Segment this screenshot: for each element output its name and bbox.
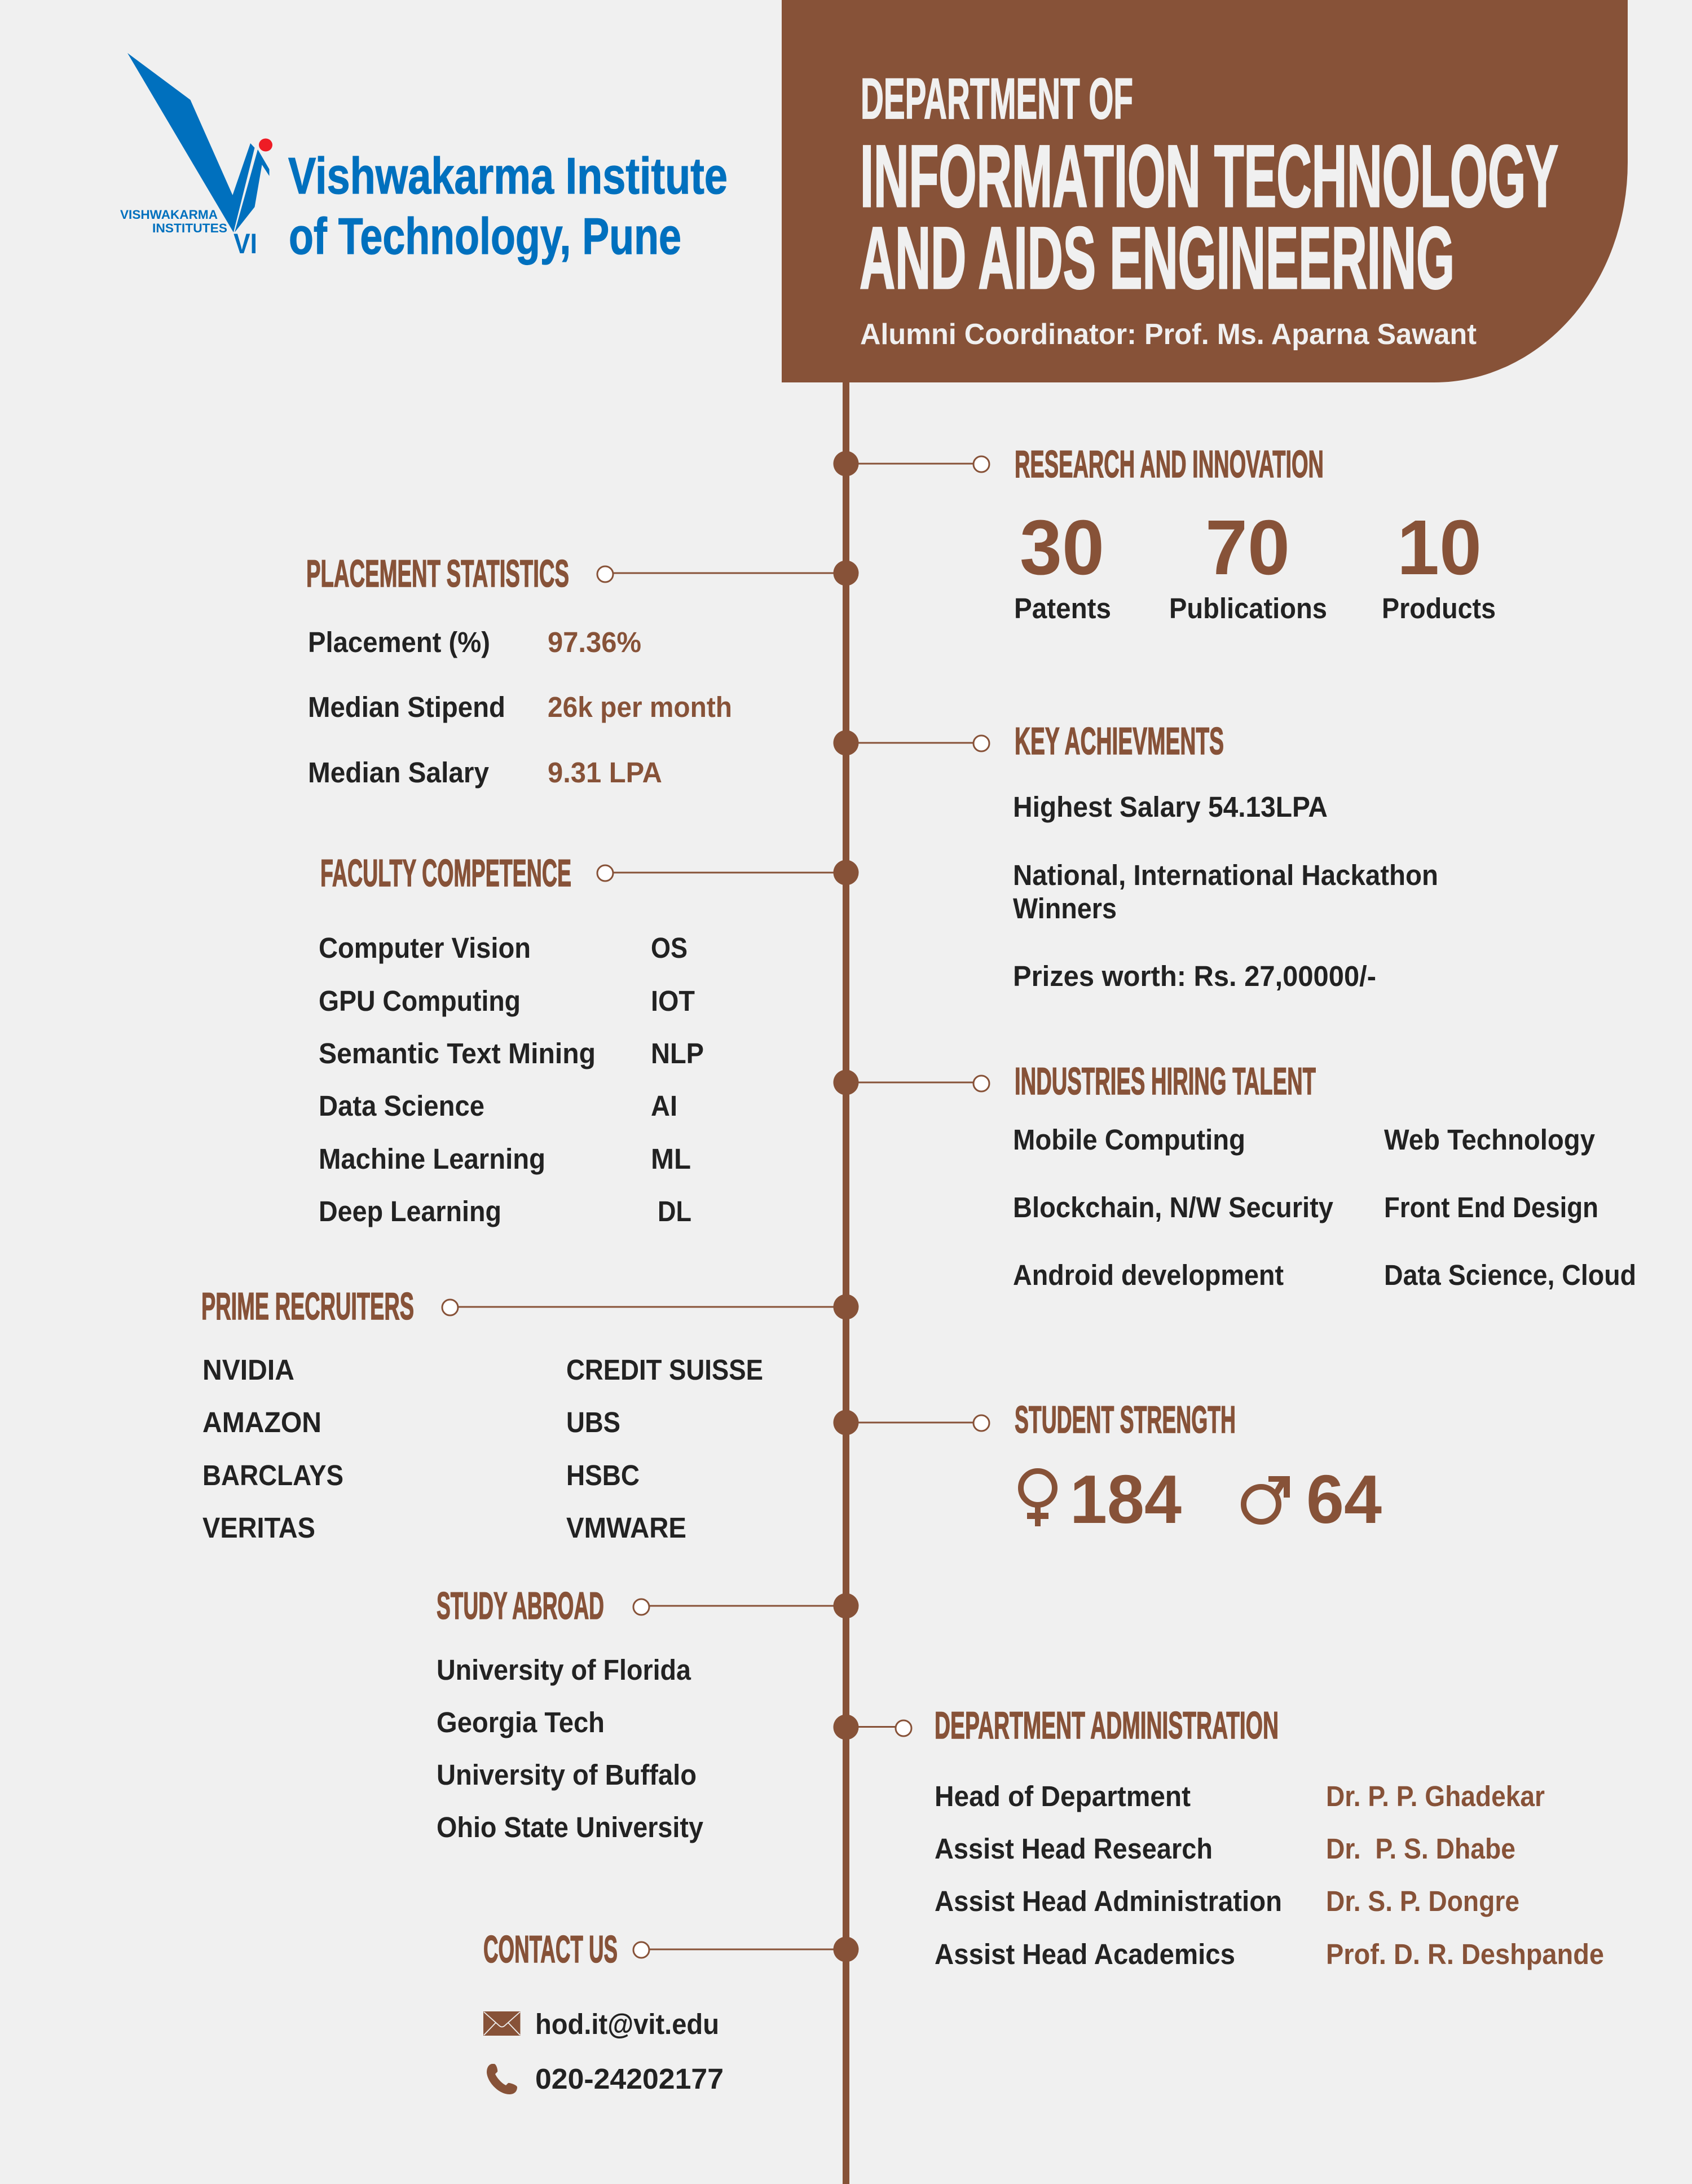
- industries list: Web Technology: [1384, 1124, 1596, 1156]
- achievements list: Winners: [1013, 892, 1117, 924]
- stat: patents: Patents: [1014, 592, 1111, 624]
- connector: [633, 1593, 858, 1619]
- stat rows: 9.31 LPA: [548, 756, 662, 789]
- stat: products: [1382, 504, 1496, 624]
- stat: patents: [1014, 504, 1111, 624]
- universities list: Ohio State University: [437, 1811, 704, 1843]
- industries list: Front End Design: [1384, 1191, 1598, 1223]
- administration roster: Dr. P. P. Ghadekar: [1326, 1780, 1545, 1812]
- institute name: of Technology, Pune: [289, 208, 681, 265]
- connector: [834, 451, 989, 476]
- administration roster: Assist Head Administration: [935, 1885, 1282, 1917]
- competence list: Semantic Text Mining: [319, 1037, 596, 1069]
- competence list: IOT: [651, 985, 695, 1017]
- administration roster: Assist Head Research: [935, 1833, 1213, 1865]
- achievements list: Highest Salary 54.13LPA: [1013, 791, 1328, 823]
- panel: placement statistics: [306, 552, 858, 789]
- recruiters list: HSBC: [566, 1459, 640, 1491]
- panel: department administration: [834, 1704, 1604, 1970]
- universities list: University of Buffalo: [437, 1759, 697, 1791]
- stat: products: 10: [1397, 504, 1482, 591]
- heading: KEY ACHIEVMENTS: [1015, 720, 1224, 763]
- industries list: [1013, 1124, 1636, 1291]
- competence list: NLP: [651, 1037, 704, 1069]
- industries list: Blockchain, N/W Security: [1013, 1191, 1334, 1223]
- email address: hod.it@vit.edu: [535, 2008, 719, 2040]
- competence list: OS: [651, 932, 688, 964]
- universities list: Georgia Tech: [437, 1706, 605, 1738]
- institute name: [288, 148, 728, 265]
- recruiters list: VERITAS: [202, 1512, 315, 1544]
- competence list: DL: [658, 1195, 691, 1227]
- competence list: Deep Learning: [319, 1195, 501, 1227]
- industries list: Data Science, Cloud: [1384, 1259, 1636, 1291]
- institute name: Vishwakarma Institute: [288, 148, 728, 205]
- stat rows: Median Salary: [308, 756, 490, 789]
- phone number: 020-24202177: [535, 2063, 724, 2095]
- department label: DEPARTMENT OF: [861, 67, 1133, 131]
- panel: research and innovation: [834, 443, 1496, 624]
- heading: STUDENT STRENGTH: [1015, 1398, 1236, 1441]
- heading: PRIME RECRUITERS: [201, 1285, 414, 1328]
- connector: [834, 1715, 911, 1740]
- icon: male symbol: [1244, 1476, 1290, 1522]
- logo: Vishwakarma Institute of Technology: [120, 53, 728, 265]
- department title: [860, 127, 1558, 307]
- competence list: Computer Vision: [319, 932, 531, 964]
- male count: 64: [1306, 1461, 1382, 1538]
- connector: [597, 860, 858, 886]
- alumni coordinator: Alumni Coordinator: Prof. Ms. Aparna Sawant: [860, 318, 1477, 351]
- competence list: AI: [651, 1090, 677, 1122]
- icon: phone: [487, 2064, 517, 2094]
- achievements list: Prizes worth: Rs. 27,00000/-: [1013, 960, 1376, 992]
- stat rows: 97.36%: [548, 626, 641, 658]
- administration roster: Assist Head Academics: [935, 1938, 1235, 1970]
- icon: female symbol: [1021, 1471, 1055, 1526]
- panel: industries hiring talent: [834, 1060, 1636, 1291]
- connector: [834, 730, 989, 756]
- heading: DEPARTMENT ADMINISTRATION: [935, 1704, 1279, 1747]
- administration roster: Dr. P. S. Dhabe: [1326, 1833, 1515, 1865]
- administration roster: Head of Department: [935, 1780, 1191, 1812]
- heading: RESEARCH AND INNOVATION: [1015, 443, 1324, 486]
- recruiters list: CREDIT SUISSE: [566, 1354, 763, 1386]
- panel: key achievements: [834, 720, 1438, 992]
- stat: patents: 30: [1020, 504, 1104, 591]
- recruiters list: UBS: [566, 1406, 620, 1438]
- universities list: University of Florida: [437, 1654, 691, 1686]
- competence list: Machine Learning: [319, 1143, 545, 1175]
- recruiters list: AMAZON: [202, 1406, 321, 1438]
- panel: student strength: [834, 1398, 1382, 1538]
- recruiters list: VMWARE: [566, 1512, 686, 1544]
- heading: INDUSTRIES HIRING TALENT: [1015, 1060, 1316, 1103]
- stat rows: 26k per month: [548, 691, 732, 723]
- stat: products: Products: [1382, 592, 1496, 624]
- panel: contact us: [483, 1928, 858, 2095]
- competence list: [319, 932, 704, 1227]
- competence list: GPU Computing: [319, 985, 521, 1017]
- icon: envelope: [483, 2011, 520, 2036]
- connector: [597, 561, 858, 585]
- panel: faculty competence: [319, 852, 858, 1227]
- competence list: ML: [651, 1143, 691, 1175]
- recruiters list: BARCLAYS: [202, 1459, 343, 1491]
- connector: [834, 1410, 989, 1435]
- female count: 184: [1070, 1461, 1182, 1538]
- stat rows: [308, 626, 732, 789]
- connector: [834, 1069, 989, 1095]
- competence list: Data Science: [319, 1090, 484, 1122]
- administration roster: Dr. S. P. Dongre: [1326, 1885, 1519, 1917]
- stat rows: Median Stipend: [308, 691, 505, 723]
- connector: [442, 1294, 858, 1320]
- recruiters list: [202, 1354, 763, 1544]
- universities list: [437, 1654, 704, 1843]
- stat: publications: [1169, 504, 1327, 624]
- header panel: [782, 0, 1628, 382]
- logo small text: VISHWAKARMA: [120, 208, 218, 222]
- heading: FACULTY COMPETENCE: [320, 852, 571, 895]
- industries list: Mobile Computing: [1013, 1124, 1245, 1156]
- administration roster: Prof. D. R. Deshpande: [1326, 1938, 1604, 1970]
- achievements list: [1013, 791, 1438, 992]
- achievements list: National, International Hackathon: [1013, 859, 1438, 891]
- panel: prime recruiters: [201, 1285, 858, 1544]
- heading: PLACEMENT STATISTICS: [306, 552, 569, 595]
- timeline spine: [843, 378, 849, 2184]
- heading: CONTACT US: [483, 1928, 618, 1971]
- connector: [633, 1937, 858, 1962]
- stat: publications: 70: [1205, 504, 1290, 591]
- recruiters list: NVIDIA: [202, 1354, 294, 1386]
- logo small text: [120, 208, 257, 259]
- icon: V mark: [127, 53, 272, 232]
- stat: publications: Publications: [1169, 592, 1327, 624]
- industries list: Android development: [1013, 1259, 1284, 1291]
- logo small text: VI: [233, 228, 257, 259]
- logo small text: INSTITUTES: [152, 221, 227, 235]
- administration roster: [935, 1780, 1604, 1970]
- panel: study abroad: [437, 1584, 858, 1843]
- heading: STUDY ABROAD: [437, 1584, 604, 1627]
- stat rows: Placement (%): [308, 626, 490, 658]
